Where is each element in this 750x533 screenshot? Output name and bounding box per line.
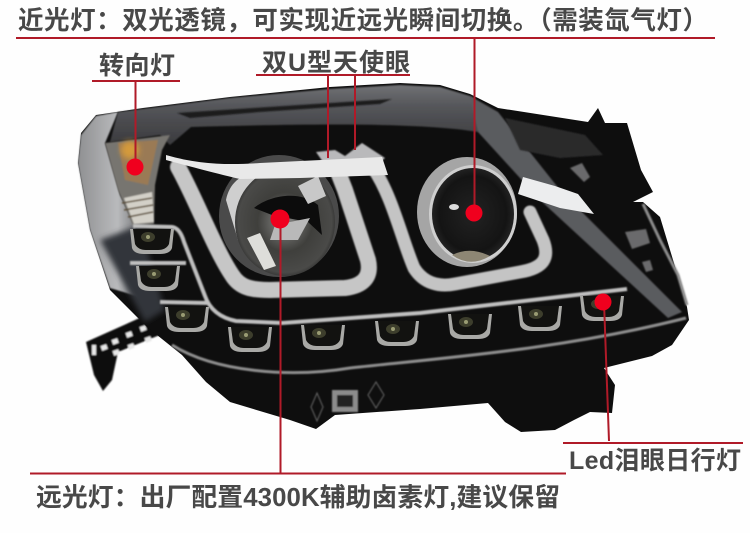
angel eye label: 双U型天使眼 [262,49,410,77]
white band right [518,177,594,214]
low beam marker dot [466,204,482,222]
metal clips on the right [570,163,653,272]
callout: double U angel eye [256,49,410,158]
turn signal marker dot [126,158,144,176]
daytime running strip [130,226,627,323]
angel eye leader lines [256,75,410,158]
callout: low beam [16,7,715,222]
high beam marker dot [270,210,290,228]
right outer edge [643,204,687,305]
lower trim line [172,318,686,373]
housing silhouette [78,83,689,432]
left projector lens [219,155,339,277]
callout: turn signal [92,52,180,176]
callout: high beam [30,210,566,512]
white top band [166,155,388,179]
turn signal leader line [92,81,180,166]
low beam label: 近光灯：双光透镜，可实现近远光瞬间切换。（需装氙气灯） [18,7,708,35]
turn signal [105,135,170,226]
high beam label: 远光灯：出厂配置4300K辅助卤素灯,建议保留 [36,482,560,512]
right projector lens [417,157,517,267]
right bracket detail [505,118,603,158]
callout: LED daytime running light [563,294,743,475]
dark streak in top band [177,99,392,118]
right diagonal glass strip [470,96,682,318]
glass left [78,112,150,300]
turn signal label: 转向灯 [99,52,175,80]
LED row [130,229,624,352]
top glass band [110,85,490,145]
LED marker dot [594,294,612,310]
right U-shaped angel eye [373,168,546,285]
tube fins behind band [316,143,385,172]
fade of glass lower left [100,225,165,322]
low beam leader line [16,38,715,212]
mounting bracket left [86,308,172,391]
high beam leader line [30,220,566,474]
left U-shaped angel eye [178,167,369,290]
lower housing details [311,382,384,421]
LED leader line [563,302,743,443]
LED label: Led泪眼日行灯 [569,447,741,475]
headlight photo illustration [78,83,689,432]
